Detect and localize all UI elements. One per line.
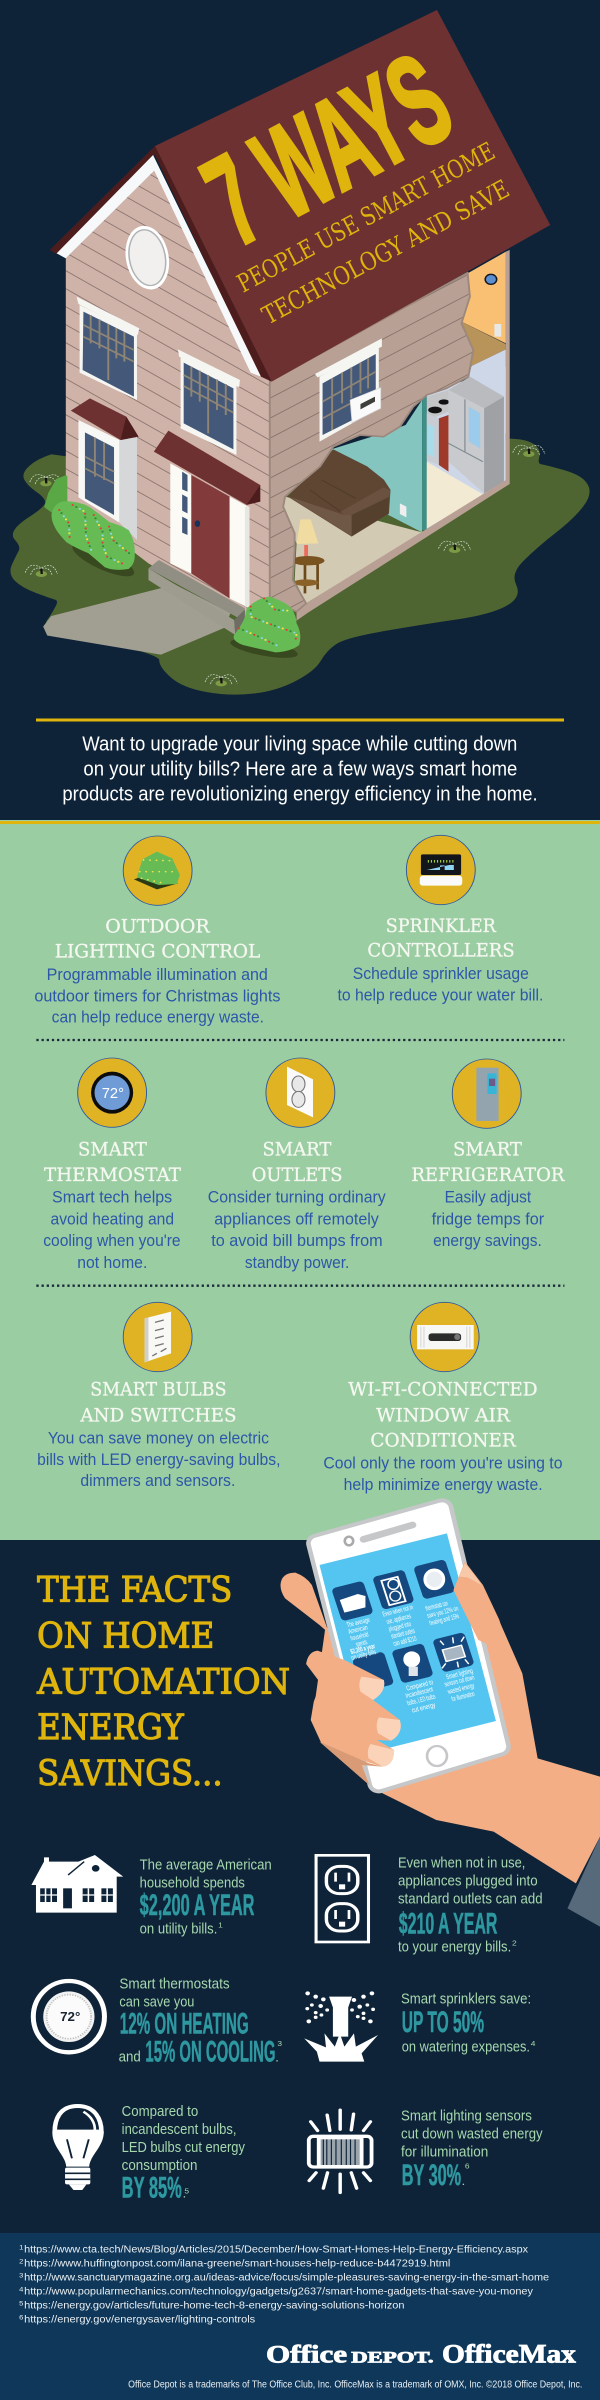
fact: utility bills: The average American	[140, 1857, 272, 1873]
front door with side lights and awning	[154, 431, 260, 608]
fact: lighting sensors: BY 30%	[402, 2158, 461, 2192]
fact: LED bulbs: .	[183, 2186, 186, 2200]
phone screen captions: on utility bills.	[350, 1647, 378, 1662]
icon: outlet	[316, 1855, 368, 1942]
fact: heating and cooling: 3	[277, 2039, 283, 2048]
text: refrigerator description: fridge temps for	[432, 1210, 544, 1228]
text: air conditioner description: help minimize energy waste.	[344, 1475, 543, 1494]
icon: smart refrigerator	[452, 1059, 521, 1128]
fact: utility bills: 1	[218, 1921, 223, 1929]
text: refrigerator description: Easily adjust	[445, 1188, 531, 1206]
sources list	[19, 2244, 549, 2325]
fact: LED bulbs: incandescent bulbs,	[122, 2122, 236, 2138]
text: thermostat description: avoid heating and	[51, 1210, 174, 1228]
text: thermostat description: not home.	[77, 1253, 147, 1272]
phone screen captions: can add $210	[392, 1634, 418, 1648]
fact: sprinklers: on watering expenses.	[402, 2040, 530, 2055]
text: smart bulbs description	[37, 1428, 280, 1490]
palm and arm	[314, 1562, 600, 1883]
fact: lighting sensors: for illumination	[401, 2145, 488, 2160]
phone screen captions: plugged into	[387, 1620, 412, 1633]
roof gable edge	[50, 146, 272, 382]
sources list: 3	[19, 2272, 23, 2279]
headings: smart: SMART	[262, 1138, 332, 1160]
text: thermostat description	[43, 1188, 181, 1272]
text: outdoor lighting description: can help reduce energy waste.	[52, 1008, 264, 1026]
heading: outdoor lighting control: LIGHTING CONTROL	[55, 940, 260, 962]
dotted divider one	[36, 1036, 564, 1043]
fact: sprinklers: UP TO 50%	[402, 2005, 484, 2039]
phone screen captions: cut energy	[410, 1700, 437, 1714]
thumb nail	[459, 1563, 481, 1585]
panel: footer	[0, 2233, 600, 2400]
phone screen captions: The average	[345, 1615, 371, 1629]
heading: wi-fi air conditioner: WINDOW AIR	[376, 1404, 511, 1426]
fact: standby appliances: 2	[512, 1939, 517, 1947]
fact: LED bulbs: LED bulbs cut energy	[122, 2140, 245, 2156]
headings: smart	[78, 1138, 522, 1160]
fact: standby appliances: Even when not in use,	[398, 1855, 525, 1871]
facts row one: 15% ON COOLING	[145, 2035, 276, 2068]
fact: LED bulbs: BY 85%	[122, 2170, 182, 2204]
sources list: https://energy.gov/energysaver/lighting-controls	[24, 2314, 256, 2325]
roof panel	[155, 10, 550, 382]
sofa	[289, 450, 390, 536]
illustration: hand holding phone: for illumination	[450, 1689, 476, 1703]
fact: sprinklers: 4	[531, 2039, 536, 2048]
lamp and side table	[292, 519, 324, 593]
thumb over phone	[453, 1562, 509, 1653]
fact: sprinklers: Smart sprinklers save:	[401, 1991, 531, 2007]
headings: smart: SMART	[78, 1138, 147, 1160]
heading: the facts on home automation energy savings: ENERGY	[37, 1706, 184, 1747]
heading: thermostat, outlets, refrigerator	[44, 1163, 565, 1186]
logo: Office Depot OfficeMax: OfficeMax	[442, 2339, 577, 2369]
logo: Office Depot OfficeMax	[266, 2339, 577, 2369]
window: upper centre	[178, 349, 240, 455]
facts row three	[52, 2104, 543, 2204]
text: outdoor lighting description: outdoor timers for Christmas lights	[34, 986, 281, 1005]
phone screen captions: household	[349, 1630, 370, 1642]
fact: utility bills	[140, 1857, 272, 1937]
fact: sprinklers	[401, 1991, 536, 2055]
sources list: https://www.huffingtonpost.com/ilana-greene/smart-houses-help-reduce-b4472919.html	[24, 2258, 450, 2269]
phone screen captions: American	[347, 1623, 369, 1636]
phone screen captions: wasted energy	[446, 1681, 476, 1696]
heading: the facts on home automation energy savings: THE FACTS	[37, 1569, 232, 1610]
fact: lighting sensors: Smart lighting sensors	[401, 2109, 532, 2124]
background: navy hero	[0, 0, 600, 820]
heading: sprinkler controllers: SPRINKLER	[386, 914, 497, 937]
heading: wi-fi air conditioner: CONDITIONER	[370, 1429, 517, 1451]
fact: utility bills: $2,200 A YEAR	[140, 1888, 255, 1922]
phone screen captions: sensors cut down	[443, 1673, 475, 1688]
icon: lighting sensor	[309, 2110, 372, 2193]
heading: thermostat, outlets, refrigerator: REFRIGERATOR	[411, 1163, 565, 1186]
fact: lighting sensors: cut down wasted energy	[401, 2127, 543, 2142]
panel: facts background	[0, 1540, 600, 2233]
round attic window	[121, 223, 174, 292]
icon: sprinkler controller	[406, 835, 475, 905]
shrub with holiday lights: left	[52, 502, 139, 582]
fact: standby appliances	[398, 1855, 543, 1955]
icon: smart thermostat	[78, 1058, 147, 1127]
window: right wall with air conditioner	[315, 338, 382, 442]
back shrub	[46, 477, 66, 515]
heading: the facts on home automation energy savings: AUTOMATION	[36, 1661, 290, 1702]
fact: heating and cooling	[119, 1976, 283, 2068]
window: upper left	[77, 297, 139, 400]
heading: the facts on home automation energy savings: ON HOME	[37, 1615, 214, 1656]
phone screen captions: save you 12% on	[426, 1604, 459, 1620]
shirt sleeve	[567, 1837, 600, 1927]
floor edge and right wall edge	[297, 250, 510, 621]
heading: outdoor lighting control: OUTDOOR	[105, 915, 211, 937]
fact: heating and cooling: .	[275, 2051, 279, 2064]
phone screen captions: Even when not in	[381, 1603, 414, 1618]
text: thermostat description: Smart tech helps	[52, 1188, 172, 1206]
heading: sprinkler controllers	[367, 914, 515, 961]
text: outdoor lighting description: Programmable illumination and	[47, 965, 268, 984]
phone screen captions: standard outlets	[390, 1627, 416, 1640]
fact: standby appliances: to your energy bills.	[398, 1939, 511, 1955]
text: smart bulbs description: bills with LED energy-saving bulbs,	[37, 1450, 280, 1469]
window: lower left with hood	[71, 398, 139, 540]
heading: the facts on home automation energy savings: SAVINGS...	[37, 1752, 223, 1793]
icon: house	[31, 1855, 123, 1913]
icon: smart switch panel	[123, 1302, 192, 1372]
text: refrigerator description: energy savings.	[433, 1231, 542, 1250]
phone screen captions: use, appliances	[385, 1612, 412, 1626]
subtitle: people use smart home: PEOPLE USE SMART HOME	[232, 136, 500, 298]
phone screen captions: spends	[355, 1638, 368, 1648]
phone screen captions: Smart lighting	[445, 1666, 474, 1681]
left wall with siding	[66, 170, 270, 633]
text: thermostat description: cooling when you're	[43, 1231, 181, 1250]
heading: smart bulbs and switches	[79, 1378, 236, 1426]
fact: heating and cooling: 12% ON HEATING	[120, 2006, 249, 2040]
fact: standby appliances: standard outlets can add	[398, 1891, 543, 1907]
fact: LED bulbs: consumption	[122, 2158, 197, 2174]
fact: heating and cooling: Smart thermostats	[119, 1976, 230, 1992]
heading: thermostat, outlets, refrigerator: OUTLETS	[252, 1163, 342, 1186]
sources list: https://www.cta.tech/News/Blog/Articles/2015/December/How-Smart-Homes-Help-Energy-Efficiency.aspx	[24, 2244, 528, 2255]
heading: thermostat, outlets, refrigerator: THERMOSTAT	[44, 1163, 182, 1186]
text: air conditioner description	[323, 1453, 563, 1494]
fact: LED bulbs	[122, 2104, 245, 2204]
fact: standby appliances: appliances plugged into	[398, 1873, 538, 1889]
interior: attic room	[459, 252, 506, 433]
icon: LED bulb	[52, 2106, 104, 2190]
icon: smart outlet	[266, 1058, 335, 1127]
icon: outdoor lights shrub	[123, 836, 192, 905]
illustration: isometric smart house	[12, 10, 588, 693]
heading: wi-fi air conditioner: WI-FI-CONNECTED	[348, 1378, 538, 1400]
illustration: hand holding phone	[280, 1508, 600, 1927]
fact: LED bulbs: Compared to	[122, 2104, 198, 2120]
fact: LED bulbs: 5	[184, 2187, 190, 2195]
heading: outdoor lighting control	[55, 915, 260, 962]
phone screen	[320, 1533, 496, 1753]
icon: thermostat	[33, 1981, 104, 2052]
heading: the facts on home automation energy savings	[36, 1569, 290, 1793]
sources list: 5	[19, 2300, 23, 2307]
icon: window air conditioner	[410, 1302, 479, 1372]
phone screen captions	[345, 1599, 476, 1714]
porch steps	[148, 560, 245, 635]
icon: thermostat: 72°	[60, 2010, 80, 2024]
text: refrigerator description	[432, 1188, 544, 1250]
fingers over phone	[306, 1651, 401, 1785]
heading: sprinkler controllers: CONTROLLERS	[367, 939, 515, 961]
text: sprinkler description	[337, 964, 543, 1004]
phone body	[318, 1508, 499, 1783]
phone screen captions: $2,200 a year	[349, 1642, 376, 1656]
row two and three items	[36, 1163, 565, 1494]
sources list: 2	[19, 2258, 23, 2265]
phone screen captions: heating and 15%	[428, 1612, 460, 1627]
interior: kitchen floor and fridge	[427, 367, 506, 533]
fact: utility bills: on utility bills.	[140, 1921, 217, 1937]
fact: lighting sensors: .	[461, 2174, 465, 2188]
text: outlets description: standby power.	[245, 1253, 349, 1272]
text: smart bulbs description: You can save money on electric	[48, 1428, 269, 1447]
text: outlets description	[208, 1188, 386, 1272]
fact: utility bills: household spends	[140, 1875, 245, 1891]
dotted divider two	[36, 1282, 564, 1289]
intro text	[62, 733, 538, 805]
fact: heating and cooling: and	[119, 2050, 141, 2065]
text: sprinkler description: Schedule sprinkler usage	[353, 964, 529, 983]
phone screen captions: Compared to	[405, 1678, 434, 1692]
icon: smart thermostat: 72°	[102, 1086, 124, 1102]
intro rule	[36, 718, 564, 722]
heading: smart bulbs and switches: SMART BULBS	[90, 1378, 227, 1400]
driveway	[44, 580, 230, 654]
panel: smart home products	[0, 820, 600, 1540]
phone screen captions: incandescent	[404, 1685, 435, 1700]
text: outlets description: appliances off remotely	[214, 1210, 379, 1228]
sources list: 1	[19, 2244, 23, 2251]
interior: living room walls and floor	[283, 397, 427, 603]
text: smart bulbs description: dimmers and sensors.	[80, 1471, 235, 1490]
shrub with holiday lights: right	[229, 597, 300, 662]
right wall with siding and torn cutaway edge	[270, 273, 473, 612]
fact: heating and cooling: can save you	[119, 1995, 194, 2010]
sources list: 4	[19, 2286, 23, 2293]
icon: sprinkler	[304, 1991, 378, 2062]
facts row one	[31, 1855, 543, 2068]
heading: smart bulbs and switches: AND SWITCHES	[79, 1404, 236, 1426]
phone screen captions: thermostats can	[424, 1599, 449, 1612]
fact: lighting sensors: 6	[465, 2162, 470, 2170]
text: sprinkler description: to help reduce your water bill.	[337, 985, 543, 1004]
lawn	[12, 440, 588, 693]
heading: wi-fi air conditioner	[348, 1378, 538, 1451]
text: outlets description: Consider turning ordinary	[208, 1188, 386, 1206]
sources list: https://energy.gov/articles/future-home-tech-8-energy-saving-solutions-horizon	[24, 2300, 404, 2311]
sources list: http://www.sanctuarymagazine.org.au/ideas-advice/focus/simple-pleasures-saving-energy-in-the-smart-home	[24, 2272, 549, 2283]
text: outdoor lighting description	[34, 965, 281, 1026]
text: outlets description: to avoid bill bumps from	[211, 1231, 383, 1250]
sources list: http://www.popularmechanics.com/technology/gadgets/g2637/smart-home-gadgets-that-save-you-money	[24, 2286, 533, 2297]
headings: smart: SMART	[453, 1138, 522, 1160]
subtitle: technology and save: TECHNOLOGY AND SAVE	[257, 174, 514, 330]
phone screen captions: bulbs, LED bulbs	[406, 1692, 437, 1707]
lawn sprinklers	[25, 445, 545, 686]
logo: Office Depot OfficeMax: Office	[266, 2340, 347, 2368]
sources list: 6	[19, 2314, 23, 2321]
fact: lighting sensors	[401, 2109, 543, 2192]
roof white trim	[57, 155, 261, 377]
back finger	[280, 1573, 329, 1633]
row one items	[34, 835, 564, 1160]
phone app tiles	[331, 1559, 475, 1692]
logo: Office Depot OfficeMax: DEPOT.	[351, 2349, 434, 2366]
